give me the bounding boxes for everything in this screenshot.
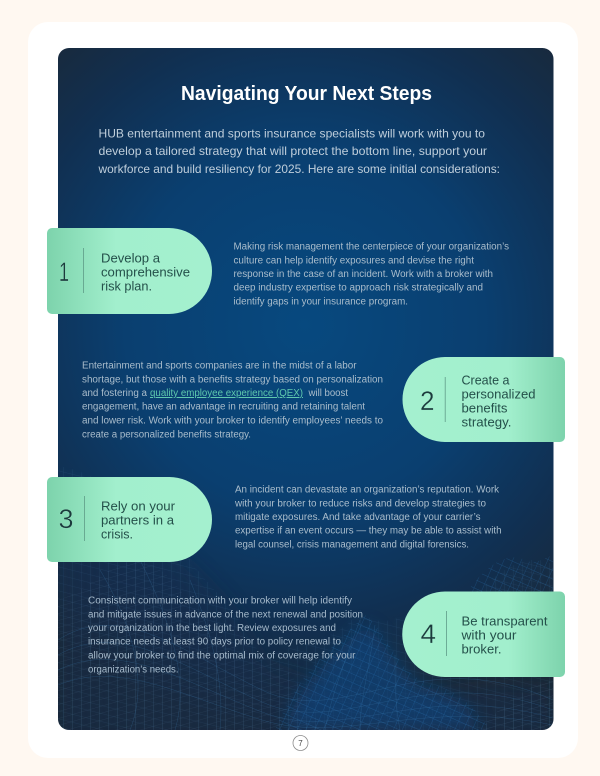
step 4 heading: Be transparent bbox=[462, 614, 548, 628]
step 4 divider bbox=[445, 611, 448, 656]
step 2 body text: and fostering a bbox=[82, 388, 147, 399]
step 4 body text: and mitigate issues in advance of the next renewal and position bbox=[88, 609, 363, 620]
step 1 heading: comprehensive bbox=[101, 264, 190, 280]
step 4 number: 4 bbox=[420, 619, 436, 649]
step 1 divider bbox=[82, 248, 85, 293]
step 3 heading: crisis. bbox=[101, 526, 133, 542]
step 2 body text: and lower risk. Work with your broker to identify employees’ needs to bbox=[82, 416, 383, 426]
step 3 body text: expertise if an event occurs — they may be able to assist with bbox=[235, 526, 502, 537]
step 1 heading: Develop a bbox=[101, 250, 161, 266]
step 1 body text: response in the case of an incident. Work with a broker with bbox=[234, 269, 493, 280]
step 4 heading bbox=[460, 614, 548, 656]
step 3 number: 3 bbox=[58, 504, 74, 534]
step 4 body text: allow your broker to find the optimal mix of coverage for your bbox=[88, 650, 356, 662]
title: Navigating Your Next Steps bbox=[181, 83, 432, 105]
step 4 pill bbox=[402, 592, 565, 677]
step 4 body text: organization’s needs. bbox=[88, 664, 178, 675]
step 2 heading bbox=[462, 372, 536, 430]
step 3 body text: mitigate exposures. And take advantage of your carrier’s bbox=[235, 512, 480, 523]
step 2 heading: benefits bbox=[462, 400, 508, 416]
step 4 body text bbox=[88, 596, 363, 675]
step 4 body text: Consistent communication with your broker will help identify bbox=[88, 596, 352, 606]
step 4 body text: insurance needs at least 90 days prior to policy renewal to bbox=[88, 637, 341, 648]
step 3 body text bbox=[234, 484, 502, 550]
step 1 heading bbox=[101, 250, 190, 294]
step 2 number: 2 bbox=[420, 386, 434, 416]
page number bbox=[293, 736, 308, 750]
dark blue panel bbox=[58, 48, 554, 740]
step 2 body text: will boost bbox=[308, 388, 348, 399]
step 3 heading: partners in a bbox=[101, 512, 175, 528]
step 4 heading: broker. bbox=[462, 642, 502, 656]
step 2 body text: engagement, have an advantage in recruiting and retaining talent bbox=[82, 402, 365, 413]
step 1 heading: risk plan. bbox=[101, 278, 152, 294]
intro text: workforce and build resiliency for 2025. Here are some initial considerations: bbox=[98, 162, 500, 176]
step 2 body text bbox=[82, 360, 383, 440]
step 1 number: 1 bbox=[59, 257, 69, 287]
step 3 heading bbox=[101, 498, 176, 542]
step 2 heading: personalized bbox=[462, 386, 536, 402]
step 2 divider bbox=[444, 377, 447, 422]
step 2 body text: create a personalized benefits strategy. bbox=[82, 429, 251, 440]
step 2 heading: Create a bbox=[462, 372, 510, 388]
step 1 body text: Making risk management the centerpiece of your organization’s bbox=[234, 242, 509, 252]
intro text bbox=[98, 126, 500, 176]
link: quality employee experience: quality employee experience (QEX) bbox=[150, 388, 303, 399]
step 2 heading: strategy. bbox=[462, 414, 512, 430]
intro text: HUB entertainment and sports insurance specialists will work with you to bbox=[98, 126, 485, 140]
step 1 body text: deep industry expertise to approach risk strategically and bbox=[234, 283, 483, 294]
page number: 7 bbox=[298, 739, 303, 748]
step 1 body text bbox=[234, 242, 509, 308]
step 3 body text: with your broker to reduce risks and develop strategies to bbox=[234, 498, 486, 509]
step 1 body text: identify gaps in your insurance program. bbox=[234, 296, 408, 308]
step 2 body text: shortage, but those with a benefits strategy based on personalization bbox=[82, 374, 383, 385]
step 4 heading: with your bbox=[460, 628, 517, 642]
step 4 body text: your organization in the best light. Review exposures and bbox=[88, 623, 336, 634]
step 3 body text: legal counsel, crisis management and digital forensics. bbox=[235, 540, 469, 550]
step 3 pill bbox=[47, 477, 212, 562]
step 3 body text: An incident can devastate an organization’s reputation. Work bbox=[235, 484, 500, 496]
step 1 body text: culture can help identify exposures and devise the right bbox=[234, 255, 474, 266]
step 2 pill bbox=[403, 357, 565, 442]
step 3 divider bbox=[83, 496, 86, 541]
intro text: develop a tailored strategy that will protect the bottom line, support your bbox=[98, 144, 487, 158]
step 2 body text: Entertainment and sports companies are in the midst of a labor bbox=[82, 360, 357, 372]
step 1 pill bbox=[47, 228, 212, 314]
step 3 heading: Rely on your bbox=[101, 498, 176, 514]
